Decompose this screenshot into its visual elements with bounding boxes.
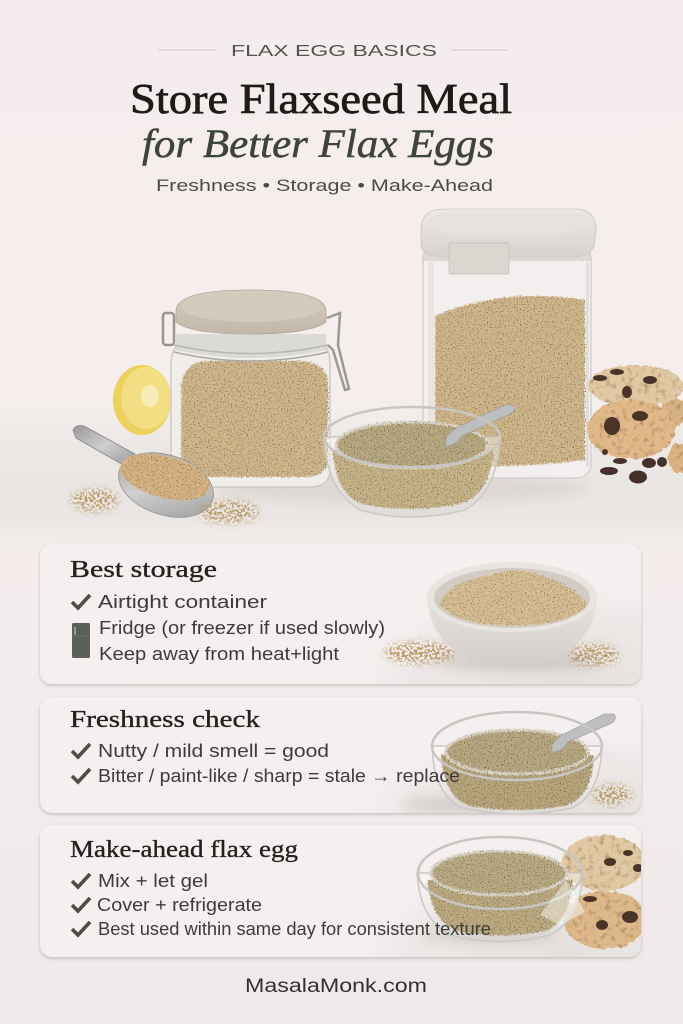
icon: glass bowl with spoon [432, 712, 615, 814]
card text: Cover + refrigerate [97, 895, 262, 915]
spilled meal [71, 489, 259, 523]
card text: Airtight container [98, 592, 267, 612]
measuring scoop with flax meal [73, 426, 222, 529]
icon: check [72, 922, 90, 935]
icon: cookies [562, 835, 647, 949]
panel: freshness check [40, 697, 641, 814]
icon: lemon half [113, 365, 171, 435]
chocolate chips [600, 457, 667, 484]
card text: Keep away from heat+light [99, 644, 339, 664]
icon: spilled flax around bowl [384, 642, 619, 666]
heading: Freshness check [70, 707, 260, 733]
icon: covered glass bowl [417, 837, 585, 942]
icon: check [72, 898, 90, 911]
card text: Bitter / paint-like / sharp = stale → replace [98, 766, 460, 786]
card text: Best used within same day for consistent texture [98, 919, 491, 939]
card text [70, 707, 460, 786]
panel: best storage [40, 544, 641, 684]
icon: fridge [72, 623, 90, 658]
glass bowl of flax gel with spoon [324, 405, 515, 517]
icon: ceramic bowl of flaxseed meal [427, 562, 597, 667]
cookies [587, 365, 683, 484]
icon: check [72, 744, 90, 757]
title [130, 77, 512, 166]
title: for Better Flax Eggs [142, 121, 494, 166]
panel: make-ahead flax egg [40, 825, 647, 957]
heading: Make-ahead flax egg [70, 837, 298, 863]
footer: MasalaMonk.com [245, 976, 427, 997]
card text [70, 837, 491, 939]
card text: Fridge (or freezer if used slowly) [99, 618, 385, 638]
heading: Best storage [70, 557, 217, 583]
header eyebrow: Flax Egg Basics: FLAX EGG BASICS [231, 43, 437, 60]
clip-top glass jar [163, 290, 349, 487]
card text: Mix + let gel [98, 871, 208, 891]
icon: check [72, 769, 90, 782]
card text: Nutty / mild smell = good [98, 741, 329, 761]
plastic wrap folds [540, 880, 585, 925]
hero photo illustration [71, 209, 683, 529]
card text [70, 557, 385, 664]
airtight tall container [421, 209, 596, 478]
subtitle: Freshness • Storage • Make-Ahead [156, 176, 493, 195]
icon: check [72, 874, 90, 887]
icon: check [72, 595, 90, 608]
title: Store Flaxseed Meal [130, 77, 512, 123]
